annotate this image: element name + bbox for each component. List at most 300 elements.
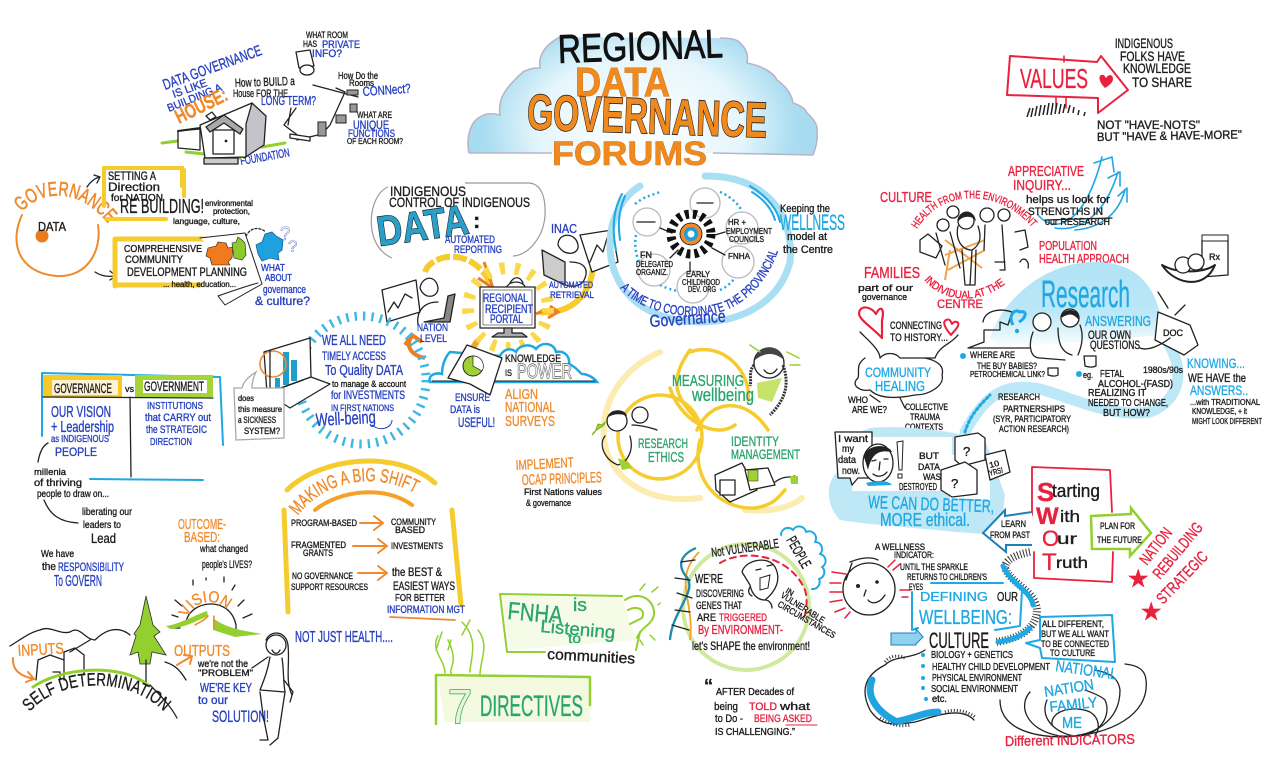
icon: tv doc: [1140, 292, 1198, 355]
icon: nation level analyst: [382, 278, 455, 325]
panel: data governance is like building a house: WHAT ROOM: [306, 30, 348, 40]
panel: values arrow: KNOWLEDGE: [1123, 60, 1191, 76]
panel: we can do better, more ethical: MORE ethical.: [880, 510, 970, 530]
panel: research: NEEDED TO CHANGE,: [1088, 398, 1168, 409]
panel: a time to coordinate the provincial governance: FN: [640, 250, 652, 260]
panel: SWOT starting with our truth: O: [1042, 526, 1059, 551]
panel: timely access to quality data: [234, 316, 426, 444]
panel: data governance is like building a house: PRIVATE: [322, 39, 360, 51]
panel: SWOT starting with our truth: ruth: [1056, 555, 1088, 572]
panel: data governance is like building a house: FOUNDATION: [239, 145, 291, 168]
panel: setting a direction: protection,: [213, 207, 250, 216]
panel: values arrow: TO SHARE: [1132, 74, 1192, 90]
panel: research: KNOWLEDGE, + it: [1192, 407, 1248, 416]
panel: a time to coordinate the provincial governance: EARLY: [686, 270, 711, 279]
panel: comprehensive community development planning: COMMUNITY: [125, 254, 184, 266]
panel: not vulnerable people: WE'RE: [695, 571, 723, 586]
question marks: ?: [280, 224, 291, 245]
panel: research: ANSWERING: [1085, 313, 1151, 330]
stars: nation rebuilding and strategic: ★: [1127, 565, 1149, 593]
panel: millenia and responsibility notes: leaders to: [83, 520, 121, 531]
panel: defining our wellbeing: Different INDICATORS: [1005, 731, 1135, 749]
panel: venn of measuring wellbeing, research ethics, identity management: IDENTITY: [731, 433, 779, 449]
icon: man face: [863, 444, 893, 486]
speech bubble: now.: [842, 466, 860, 477]
panel: culture, families, individual at the centre: POPULATION: [1039, 238, 1097, 253]
panel: timely access to quality data: WE ALL NEED: [322, 332, 386, 349]
panel: knowledge is power: NATIONAL: [505, 399, 555, 416]
panel: community healing: COMMUNITY: [865, 364, 932, 380]
panel: FNHA is listening to communities: Listening: [540, 616, 616, 643]
panel: FNHA is listening to communities: to: [568, 630, 581, 646]
panel: venn of measuring wellbeing, research ethics, identity management: RESEARCH: [638, 435, 688, 451]
panel: we can do better, more ethical: DATA: [918, 462, 940, 472]
panel: FNHA is listening to communities: communities: [547, 646, 636, 668]
panel: a time to coordinate the provincial governance: FNHA: [728, 252, 751, 261]
flow arrows: [425, 257, 490, 282]
icon: laughing face: [742, 560, 778, 608]
icon: boxes and note: YRS!: [988, 466, 1004, 478]
panel: venn of measuring wellbeing, research ethics, identity management: MANAGEMENT: [731, 446, 800, 462]
panel: defining our wellbeing: [830, 542, 1146, 749]
icon: vision sunrise: VISION: [178, 591, 232, 614]
panel: comprehensive community development planning: [115, 224, 310, 308]
panel: values arrow: INDIGENOUS: [1115, 35, 1173, 51]
icon: woman standing: [252, 633, 293, 745]
panel: knowledge is power: SURVEYS: [505, 413, 555, 430]
panel: 7 directives: [436, 620, 590, 734]
panel: research: ANSWERS..: [1190, 382, 1248, 398]
panel: making a big shift: NO GOVERNANCE: [292, 571, 353, 581]
heading: governance: GOVERNANCE: [14, 182, 118, 224]
panel: regional recipient portal and data flows: INAC: [551, 221, 577, 236]
speech bubble: [835, 432, 872, 485]
nested circles: national, nation, family, me: FAMILY: [1049, 694, 1098, 716]
panel: indigenous control of indigenous data: INDIGENOUS: [390, 183, 466, 199]
curved heading: A TIME TO COORDINATE THE PROVINCIAL: [620, 250, 778, 316]
panel: comprehensive community development planning: ... health, education...: [163, 280, 236, 289]
panel: governance vs government: + Leadership: [51, 419, 114, 436]
panel: data governance is like building a house: OF EACH ROOM?: [347, 137, 403, 146]
panel: making a big shift: COMMUNITY: [391, 517, 436, 527]
panel: defining our wellbeing: DEFINING: [920, 589, 988, 604]
panel: SWOT starting with our truth: tarting: [1052, 481, 1100, 501]
panel: indigenous control of indigenous data: [371, 183, 545, 258]
icon: smiling girl with braids: [750, 345, 800, 415]
panel: appreciative inquiry: INQUIRY...: [1013, 177, 1071, 194]
panel: we can do better, more ethical: DESTROYED: [899, 482, 937, 493]
panel: making a big shift: PROGRAM-BASED: [291, 518, 357, 528]
callout: all different: [1026, 615, 1115, 662]
icon: DNA helix: [670, 548, 699, 640]
panel: SWOT starting with our truth: W: [1036, 503, 1059, 530]
panel: setting a direction: Direction: [108, 180, 160, 194]
panel: SWOT starting with our truth: [983, 467, 1151, 642]
panel: self determination landscape: [9, 516, 294, 746]
panel: data governance is like building a house: [161, 30, 411, 168]
panel: research: WHERE ARE: [970, 350, 1015, 360]
panel: culture, families, individual at the centre: HEALTH FROM THE ENVIRONMENT: [910, 190, 1038, 229]
panel: self determination landscape: we're not the: [197, 659, 248, 670]
panel: making a big shift: GRANTS: [303, 548, 333, 558]
panel: self determination landscape: OUTPUTS: [174, 643, 230, 660]
panel: research: eg.: [1083, 370, 1093, 380]
panel: data governance is like building a house: Rooms: [349, 78, 374, 88]
panel: governance vs government: the STRATEGIC: [146, 424, 207, 436]
quote: to Do -: [715, 713, 743, 725]
heading: research: Research: [1041, 274, 1130, 316]
panel: we can do better, more ethical: BUT: [919, 451, 940, 461]
panel: not vulnerable people: CIRCUMSTANCES: [776, 599, 837, 640]
panel: implement ocap principles: IMPLEMENT: [515, 454, 574, 473]
panel: comprehensive community development planning: ABOUT: [265, 273, 292, 284]
panel: research: KNOWING...: [1187, 355, 1245, 371]
panel: governance vs government: GOVERNMENT: [144, 378, 204, 394]
arrow: plan for the future: [1091, 508, 1151, 556]
panel: data governance is like building a house: CONNect?: [362, 81, 411, 99]
panel: comprehensive community development planning: ?: [288, 237, 297, 256]
icon: vision sunrise: [166, 576, 262, 637]
panel: appreciative inquiry: STRENGTHS IN: [1028, 206, 1103, 218]
icon: skyline and two people: [968, 309, 1096, 376]
panel: data governance is like building a house: WHAT ARE: [357, 110, 392, 120]
panel: SWOT starting with our truth: ur: [1057, 531, 1078, 548]
panel: defining our wellbeing: EYES: [909, 582, 923, 592]
icon: central sun emblem: [671, 214, 711, 254]
panel: a time to coordinate the provincial governance: DEV. ORG: [688, 285, 716, 294]
panel: culture, families, individual at the centre: part of our: [858, 283, 913, 293]
speech bubble: I want: [838, 434, 868, 445]
panel: governance vs government: vs: [125, 384, 134, 394]
panel: defining our wellbeing: CULTURE: [929, 628, 989, 653]
panel: governance vs government: GOVERNANCE: [54, 380, 112, 396]
panel: values arrow: VALUES: [1020, 63, 1088, 94]
panel: making a big shift: the BEST &: [392, 565, 442, 579]
panel: making a big shift: [282, 458, 465, 646]
panel: governance vs government: that CARRY out: [145, 412, 211, 424]
icon: two people with thumbs up: [592, 407, 657, 470]
panel: FNHA is listening to communities: is: [573, 595, 587, 615]
nested circles: national, nation, family, me: NATIONAL: [1054, 658, 1118, 684]
panel: values arrow: [1007, 35, 1242, 144]
panel: data governance is like building a house: BUILDING A: [166, 82, 224, 115]
panel: self determination landscape: OUTCOME-: [178, 516, 226, 533]
note: sickness system: this measure: [238, 405, 283, 414]
panel: millenia and responsibility notes: liberating our: [82, 507, 133, 518]
panel: defining our wellbeing: INDICATOR:: [894, 550, 934, 560]
panel: defining our wellbeing: etc.: [932, 694, 947, 705]
panel: timely access to quality data: IN FIRST NATIONS: [331, 403, 394, 413]
panel: research: [960, 262, 1262, 434]
panel: culture, families, individual at the centre: [858, 189, 1129, 311]
stars: nation rebuilding and strategic: NATION: [1137, 525, 1176, 568]
panel: venn of measuring wellbeing, research ethics, identity management: ETHICS: [648, 449, 684, 466]
panel: FNHA is listening to communities: [500, 584, 660, 668]
panel: millenia and responsibility notes: millenia: [34, 467, 66, 477]
panel: governance and data circle: [14, 174, 118, 281]
panel: defining our wellbeing: A WELLNESS: [875, 542, 925, 552]
callout: all different: TO CULTURE: [1050, 648, 1095, 658]
panel: SWOT starting with our truth: ith: [1060, 507, 1080, 526]
panel: not vulnerable people: Not VULNERABLE: [710, 536, 780, 560]
heading: data governance: DATA GOVERNANCE: [161, 42, 264, 94]
panel: a time to coordinate the provincial governance: model at: [787, 231, 827, 243]
node circles: [633, 188, 758, 303]
icon: heart: [1099, 75, 1113, 88]
nested circles: national, nation, family, me: NATION: [1043, 676, 1095, 701]
icon: nest and rx jar: Rx: [1209, 252, 1220, 262]
arrow: plan for the future: THE FUTURE: [1097, 535, 1142, 545]
arrow: learn from past: [983, 510, 1032, 552]
icon: boxes and note: ?: [963, 444, 970, 459]
panel: research: RESEARCH: [998, 392, 1040, 402]
panel: data governance is like building a house: HOUSE:: [172, 84, 232, 128]
panel: research: ...with TRADITIONAL: [1190, 398, 1261, 407]
panel: not vulnerable people: PEOPLE: [783, 534, 814, 571]
panel: SWOT starting with our truth: T: [1042, 549, 1057, 576]
panel: comprehensive community development planning: & culture?: [255, 294, 310, 308]
panel: research: 1980s/90s: [1143, 365, 1183, 375]
stars: nation rebuilding and strategic: STRATEGIC: [1154, 548, 1212, 608]
panel: community healing: TO HISTORY...: [890, 332, 948, 344]
icon: pie chart sheet: [448, 345, 502, 395]
panel: setting a direction: language, culture,: [173, 217, 240, 226]
quote: [704, 676, 817, 738]
panel: timely access to quality data: for INVESTMENTS: [331, 388, 405, 402]
panel: regional recipient portal and data flows: LEVEL: [420, 333, 447, 345]
panel: implement ocap principles: OCAP PRINCIPLES: [522, 469, 602, 489]
panel: appreciative inquiry: [1008, 157, 1127, 230]
icon: boxes and note: ?: [951, 476, 958, 491]
panel: venn of measuring wellbeing, research ethics, identity management: wellbeing: [691, 385, 754, 405]
icon: tv doc: DOC: [1163, 328, 1184, 338]
panel: 7 directives: DIRECTIVES: [480, 690, 583, 723]
note: sickness system: SYSTEM?: [244, 426, 280, 436]
panel: regional recipient portal and data flows: [382, 221, 618, 375]
panel: timely access to quality data: TIMELY ACCESS: [322, 349, 386, 363]
panel: a time to coordinate the provincial governance: Governance: [649, 307, 726, 331]
panel: self determination landscape: SELF DETERMINATION: [22, 672, 172, 711]
panel: culture, families, individual at the centre: governance: [862, 292, 907, 302]
panel: self determination landscape: to our: [198, 693, 228, 707]
panel: culture, families, individual at the centre: CULTURE: [880, 189, 932, 206]
panel: knowledge is power: [430, 344, 597, 430]
panel: not vulnerable people: GENES THAT: [696, 600, 742, 612]
panel: knowledge is power: USEFUL!: [458, 414, 495, 430]
panel: a time to coordinate the provincial governance: DELEGATED: [636, 260, 673, 269]
panel: venn of measuring wellbeing, research ethics, identity management: MEASURING: [672, 373, 744, 390]
icon: monitor: [480, 287, 535, 337]
panel: a time to coordinate the provincial governance: WELLNESS: [780, 210, 845, 235]
ribbon with text markers: [995, 552, 1037, 642]
panel: setting a direction: environmental: [205, 199, 253, 208]
panel: defining our wellbeing: UNTIL THE SPARKLE: [900, 562, 968, 572]
panel: values arrow: FOLKS HAVE: [1120, 48, 1185, 64]
panel: millenia and responsibility notes: Lead: [91, 530, 116, 546]
panel: a time to coordinate the provincial governance: COUNCILS: [729, 235, 764, 244]
panel: not vulnerable people: ARE: [697, 612, 716, 624]
callout: all different: ALL DIFFERENT,: [1042, 619, 1104, 629]
panel: not vulnerable people: [670, 526, 837, 738]
panel: culture, families, individual at the centre: INDIVIDUAL AT THE: [924, 275, 1006, 299]
panel: a time to coordinate the provincial governance: EMPLOYMENT: [726, 227, 772, 236]
speech bubble: my: [842, 444, 854, 455]
panel: timely access to quality data: To Quality DATA: [325, 362, 403, 379]
arrow: plan for the future: PLAN FOR: [1100, 521, 1135, 531]
note: sickness system: [234, 372, 284, 440]
panel: millenia and responsibility notes: the: [42, 561, 56, 573]
panel: appreciative inquiry: APPRECIATIVE: [1008, 163, 1084, 180]
panel: millenia and responsibility notes: people to draw on...: [37, 489, 109, 500]
panel: comprehensive community development planning: governance: [263, 284, 306, 296]
panel: indigenous control of indigenous data: REPORTING: [454, 244, 502, 256]
panel: comprehensive community development planning: COMPREHENSIVE: [124, 244, 202, 255]
icon: boxes and note: 10: [988, 458, 1001, 470]
panel: culture, families, individual at the centre: FAMILIES: [864, 265, 920, 282]
panel: culture, families, individual at the centre: HEALTH APPROACH: [1039, 251, 1129, 266]
panel: appreciative inquiry: helps us look for: [1026, 194, 1110, 206]
icon: boxes and note: [941, 433, 1010, 497]
quote: what: [779, 701, 810, 713]
sun rays: [468, 268, 548, 348]
panel: research: ACTION RESEARCH): [999, 424, 1069, 434]
panel: knowledge is power: ENSURE: [455, 392, 490, 404]
panel: community healing: ARE WE?: [852, 405, 887, 416]
quote: IS CHALLENGING.”: [715, 727, 795, 738]
panel: setting a direction: SETTING A: [108, 169, 156, 183]
panel: making a big shift: FOR BETTER: [395, 593, 445, 604]
panel: self determination landscape: BASED:: [184, 529, 220, 546]
panel: data governance is like building a house: UNIQUE: [353, 118, 389, 132]
callout: all different: TO BE CONNECTED: [1041, 639, 1109, 649]
panel: millenia and responsibility notes: [34, 443, 133, 590]
quote: AFTER Decades of: [716, 687, 794, 698]
panel: governance vs government: OUR VISION: [51, 404, 111, 421]
panel: a time to coordinate the provincial governance: Keeping the: [780, 203, 830, 215]
panel: data governance is like building a house: INFO?: [312, 48, 342, 60]
icon: INAC analyst: [542, 230, 618, 286]
ribbon: [865, 650, 975, 726]
panel: research: PARTNERSHIPS: [1003, 404, 1065, 414]
panel: a time to coordinate the provincial governance: [606, 172, 845, 331]
icon: sprouts: [436, 620, 484, 675]
icon: floor plan: [284, 85, 358, 141]
panel: a time to coordinate the provincial governance: the Centre: [783, 244, 833, 256]
stars: nation rebuilding and strategic: ★: [1140, 598, 1162, 626]
icon: nest and rx jar: [1162, 235, 1228, 282]
panel: culture, families, individual at the centre: CENTRE: [937, 297, 983, 311]
icon: house: [162, 103, 285, 164]
panel: we can do better, more ethical: [829, 395, 1010, 535]
panel: governance vs government: INSTITUTIONS: [147, 401, 203, 412]
quote: being: [714, 701, 738, 713]
panel: regional recipient portal and data flows: RECIPIENT: [485, 302, 533, 316]
panel: appreciative inquiry: our RESEARCH: [1045, 217, 1110, 228]
speech bubble: data: [838, 455, 856, 466]
nested circles: national, nation, family, me: [1000, 658, 1146, 737]
panel: venn of measuring wellbeing, research ethics, identity management: [592, 345, 802, 510]
quote: BEING ASKED: [754, 713, 812, 725]
panel: making a big shift: MAKING A BIG SHIFT: [288, 468, 421, 516]
panel: not vulnerable people: By ENVIRONMENT-: [698, 622, 783, 637]
icon: laptop with bar chart: [260, 338, 330, 408]
title cloud: [468, 22, 817, 173]
panel: a time to coordinate the provincial governance: ORGANIZ.: [636, 268, 668, 277]
panel: making a big shift: BASED: [395, 525, 425, 535]
panel: research: THE BUY BABIES?: [977, 361, 1037, 371]
panel: defining our wellbeing: RETURNS TO CHILDREN'S: [907, 572, 987, 582]
arrow: to culture: [891, 629, 923, 645]
icon: toilet room: [296, 50, 314, 75]
panel: data governance is like building a house: FUNCTIONS: [348, 128, 395, 140]
arrow: learn from past: FROM PAST: [990, 530, 1030, 540]
panel: making a big shift: INFORMATION MGT: [387, 604, 465, 616]
panel: not vulnerable people: VULNERABLE: [779, 590, 827, 625]
panel: 7 directives: 7: [448, 681, 472, 734]
large word: data: DATA: [374, 196, 471, 255]
panel: millenia and responsibility notes: of thriving: [34, 478, 82, 489]
stars: nation rebuilding and strategic: [1127, 520, 1212, 626]
panel: research: FETAL: [1100, 369, 1124, 380]
panel: defining our wellbeing: PHYSICAL ENVIRONMENT: [932, 673, 1022, 684]
panel: self determination landscape: SOLUTION!: [212, 707, 269, 726]
panel: not vulnerable people: DISCOVERING: [696, 588, 744, 600]
panel: millenia and responsibility notes: RESPONSIBILITY: [58, 560, 124, 574]
panel: millenia and responsibility notes: To GOVERN: [54, 573, 102, 590]
panel: indigenous control of indigenous data: :: [473, 208, 480, 233]
panel: setting a direction: RE BUILDING!: [120, 196, 204, 218]
panel: research: QUESTIONS: [1090, 338, 1140, 352]
panel: community healing: WHO: [848, 395, 868, 405]
note: sickness system: a SICKNESS: [238, 415, 276, 425]
panel: data governance is like building a house: IS LIKE: [171, 77, 209, 101]
panel: implement ocap principles: & governance: [526, 498, 571, 508]
panel: defining our wellbeing: BIOLOGY + GENETICS: [931, 650, 1013, 661]
panel: community healing: COLLECTIVE: [905, 402, 948, 412]
panel: self determination landscape: INPUTS: [17, 641, 64, 660]
panel: data governance is like building a house: How to BUILD a: [235, 74, 295, 90]
panel: data governance is like building a house: How Do the: [338, 71, 378, 82]
panel: making a big shift: SUPPORT RESOURCES: [291, 582, 368, 592]
icon: child face: [830, 558, 910, 618]
panel: research: WE HAVE the: [1188, 371, 1246, 385]
panel: timely access to quality data: to manage & account: [332, 379, 406, 389]
stars: nation rebuilding and strategic: REBUILDING: [1150, 520, 1207, 583]
panel: research: OUR OWN: [1088, 328, 1131, 342]
panel: regional recipient portal and data flows: AUTOMATED: [549, 280, 593, 290]
panel: community healing: [848, 307, 958, 432]
panel: governance vs government: DIRECTION: [150, 437, 192, 448]
panel: values arrow: BUT "HAVE & HAVE-MORE": [1097, 127, 1242, 144]
title: Data: DATA: [575, 59, 670, 105]
panel: research: PETROCHEMICAL LINK?: [970, 370, 1045, 379]
panel: indigenous control of indigenous data: CONTROL OF INDIGENOUS: [389, 194, 530, 210]
panel: regional recipient portal and data flows: RETRIEVAL: [550, 290, 594, 300]
note: sickness system: does: [238, 394, 254, 403]
panel: comprehensive community development planning: DEVELOPMENT PLANNING: [127, 265, 247, 279]
panel: research: ALCOHOL-(FASD): [1098, 379, 1173, 390]
title: Forums: FORUMS: [552, 135, 707, 173]
panel: knowledge is power: IS: [505, 368, 512, 378]
icon: puzzle pieces: [206, 229, 283, 265]
panel: defining our wellbeing: SOCIAL ENVIRONMENT: [931, 684, 1018, 695]
panel: a time to coordinate the provincial governance: HR +: [728, 218, 746, 227]
panel: defining our wellbeing: OUR: [997, 589, 1018, 604]
panel: a time to coordinate the provincial governance: CHILDHOOD: [682, 278, 720, 287]
panel: governance vs government: as INDIGENOUS: [51, 434, 109, 445]
panel: setting a direction: [104, 168, 253, 226]
title: Governance: GOVERNANCE: [526, 84, 768, 148]
